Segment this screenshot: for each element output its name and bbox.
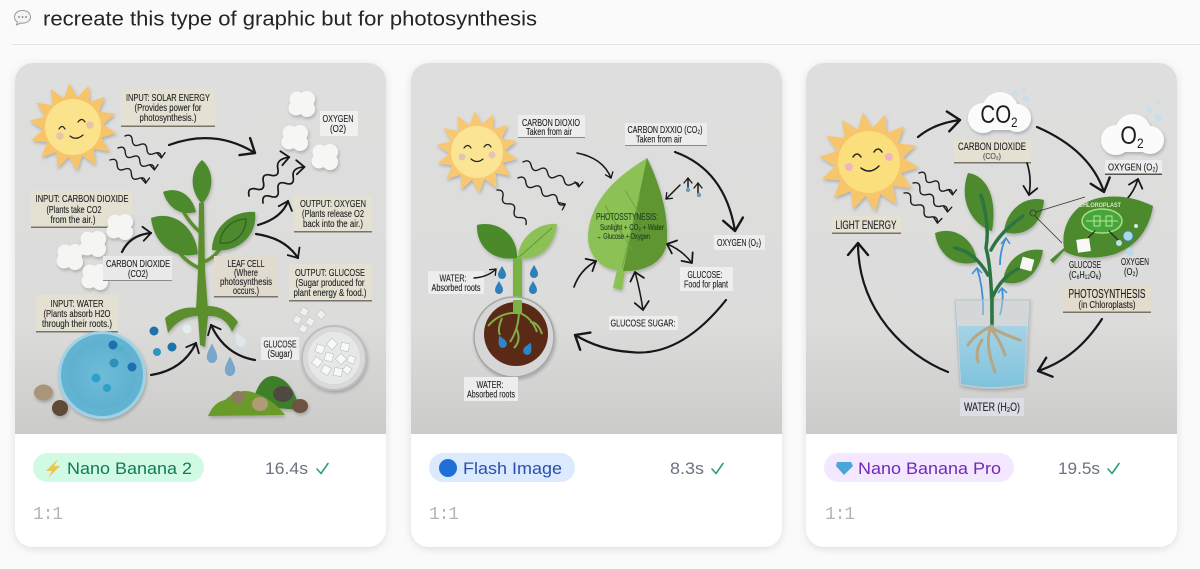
icon: speech bubble (14, 10, 30, 25)
arrow: water to sprout (474, 269, 496, 278)
icon: sun (430, 106, 524, 198)
label: oxygen: OXYGEN (O₂) (717, 237, 761, 249)
beads and droplets (150, 324, 248, 376)
badge: Nano Banana 2: Nano Banana 2 (67, 459, 192, 478)
label: input water: INPUT: WATER (50, 298, 104, 310)
arrow: photosynthesis to water (1038, 319, 1102, 371)
label: oxygen: (O2) (330, 123, 346, 135)
label: glucose food: Food for plant (684, 278, 728, 290)
label: input carbon dioxide: from the air.) (50, 214, 96, 226)
wavy oxygen arrows (246, 154, 307, 206)
generation time: 19.5s (1058, 459, 1100, 478)
label: oxygen (714, 235, 765, 250)
label: water (960, 398, 1024, 416)
arrow: carbon dioxide to leaf (577, 153, 611, 178)
label: glucose food (680, 267, 733, 291)
zoom lines to chloroplast leaf (1030, 197, 1085, 243)
cloud: CO2: 2 (1011, 114, 1018, 130)
label: leaf cell: (Where (234, 267, 258, 279)
label: carbon dxxio: CARBON DXXIO (CO₂) (628, 124, 702, 136)
label: water absorbed roots: Absorbed roots (432, 282, 480, 294)
label: water absorbed roots lower: WATER: (476, 379, 504, 391)
generation time (670, 459, 723, 478)
label: output oxygen: back into the air.) (303, 218, 363, 230)
sprout (477, 224, 557, 306)
label: carbon dioxide: CARBON DIOXIDE (106, 258, 170, 270)
label: oxygen (320, 111, 358, 136)
labels: glucose and oxygen: (O₂) (1124, 266, 1138, 278)
aspect ratio: 1:1 (429, 505, 459, 525)
panel: Nano Banana 2 card (15, 63, 386, 547)
cloud: CO2: CO (980, 100, 1011, 128)
label: carbon dioxide: (CO2) (128, 268, 148, 280)
label: input carbon dioxide: INPUT: CARBON DIOXIDE (36, 193, 128, 205)
leaf text: photosynthesis equation (596, 211, 664, 241)
label: water absorbed roots: WATER: (440, 272, 466, 284)
label: input solar energy: INPUT: SOLAR ENERGY (126, 92, 210, 104)
leaf text: photosynthesis equation: PHOTOSSTYNESIS: (596, 211, 658, 223)
label: carbon dioxide (103, 256, 172, 281)
labels: glucose and oxygen: GLUCOSE (1069, 259, 1101, 271)
glass of water with roots (955, 296, 1030, 388)
label: water absorbed roots lower: Absorbed roots (467, 388, 515, 400)
arrow: leaf to oxygen (1126, 179, 1138, 200)
chloroplast leaf (1050, 197, 1153, 263)
image: felt cycle background (806, 63, 1177, 434)
label: input solar energy (121, 89, 215, 127)
felt plant with blue xylem arrows (935, 173, 1044, 322)
water drops (495, 265, 538, 294)
generation time (265, 459, 328, 478)
label: carbon dioxide (954, 140, 1031, 164)
label: input solar energy: (Provides power for (134, 102, 202, 114)
water dish with beads (58, 331, 146, 419)
label: output glucose (289, 264, 372, 302)
bowl of sugar crystals (302, 326, 366, 390)
arrow: sun to carbon dioxide (918, 120, 960, 137)
label: carbon dxxio (625, 123, 707, 146)
leaf: photosynthesis (588, 158, 667, 290)
label: water absorbed roots lower (464, 377, 518, 401)
label: photosynthesis in chloroplasts: (in Chloroplasts) (1078, 299, 1136, 311)
label: photosynthesis in chloroplasts (1063, 285, 1151, 313)
aspect ratio: 1:1 (33, 505, 63, 525)
label: light energy (832, 216, 901, 234)
cloud: CO2 (968, 88, 1031, 133)
arrow: carbon dioxide to chloroplast leaf (1037, 127, 1104, 192)
label: glucose food: GLUCOSE: (688, 269, 722, 281)
label: input water: through their roots.) (42, 318, 112, 330)
label: glucose (261, 337, 299, 360)
label: input water: (Plants absorb H2O (44, 308, 110, 320)
image: paper collage background (411, 63, 782, 434)
dish with soil and roots (474, 297, 554, 377)
label: glucose sugar (609, 316, 678, 330)
prompt text: recreate this type of graphic but for photosynthesis (43, 8, 537, 30)
label: carbon dioxide: CARBON DIOXIDE (958, 141, 1026, 153)
label: water: WATER (H₂O) (964, 400, 1020, 414)
label: water absorbed roots (428, 271, 484, 294)
chloroplast detail (1076, 202, 1138, 256)
prompt header (14, 8, 537, 30)
badge: Flash Image (429, 453, 575, 482)
label: carbon dioxide: (CO₂) (983, 152, 1001, 161)
label: output oxygen: OUTPUT: OXYGEN (300, 198, 366, 210)
cloud: O2: O (1120, 121, 1137, 149)
label: output oxygen: (Plants release O2 (302, 208, 364, 220)
label: carbon dioxio (518, 115, 585, 138)
arrow: water to roots (151, 343, 196, 375)
badge: Nano Banana Pro (824, 453, 1014, 482)
badge: Nano Banana Pro: Nano Banana Pro (858, 459, 1001, 478)
arrow: carbon dioxide to plant (1027, 163, 1030, 195)
labels: glucose and oxygen: (C₆H₁₂O₆) (1069, 269, 1101, 281)
felt hills and rocks (208, 376, 308, 416)
label: oxygen: OXYGEN (322, 113, 354, 125)
label: leaf cell: occurs.) (233, 285, 259, 297)
cotton balls: oxygen (282, 91, 338, 170)
arrow: sun to oxygen (169, 138, 255, 153)
generation time: 8.3s (670, 459, 704, 478)
image: felt collage background (15, 63, 386, 434)
cloud: O2: 2 (1137, 135, 1144, 151)
leaf text: photosynthesis equation: → Glucose + Oxygen (596, 231, 650, 241)
arrow: water to light energy (858, 243, 948, 372)
label: leaf cell: photosynthesis (220, 276, 272, 288)
arrow: glucose back to soil (575, 300, 726, 353)
arrow: to output glucose (256, 234, 298, 258)
label: photosynthesis in chloroplasts: PHOTOSYNTHESIS (1068, 286, 1146, 301)
generation time: 16.4s (265, 459, 308, 478)
label: input carbon dioxide: (Plants take CO2 (46, 204, 102, 216)
labels: glucose and oxygen (1069, 256, 1149, 281)
felt plant (151, 160, 255, 347)
aspect ratio: 1:1 (825, 505, 855, 525)
generation time (1058, 459, 1119, 478)
wavy sunlight arrows (108, 133, 163, 186)
label: oxygen (1105, 160, 1162, 175)
label: glucose: GLUCOSE (264, 338, 296, 350)
label: glucose sugar: GLUCOSE SUGAR: (610, 318, 676, 330)
arrow: to output oxygen (258, 201, 288, 225)
arrow: glucose to roots (211, 325, 255, 360)
label: output glucose: (Sugar produced for (296, 277, 365, 289)
cotton balls: carbon dioxide (56, 214, 133, 290)
arrow: to oxygen (675, 152, 735, 231)
label: output oxygen (294, 196, 372, 232)
label: carbon dioxio: Taken from air (526, 126, 572, 138)
chloroplast detail: CHLOROPLAST (1079, 202, 1121, 209)
wavy sunlight arrows (902, 170, 954, 225)
label: leaf cell (214, 256, 278, 298)
label: oxygen: OXYGEN (O₂) (1108, 162, 1158, 174)
label: light energy: LIGHT ENERGY (836, 218, 896, 232)
arrow: carbon dioxide into leaf (122, 233, 151, 252)
wavy sunlight arrows (495, 159, 580, 226)
badge: Flash Image: Flash Image (463, 459, 562, 478)
panel: Nano Banana Pro card (806, 63, 1177, 547)
arrow: soil to leaf (574, 261, 596, 287)
label: output glucose: OUTPUT: GLUCOSE (295, 267, 365, 279)
label: output glucose: plant energy & food.) (294, 287, 366, 299)
panel: Flash Image card (411, 63, 782, 547)
double arrow: leaf and glucose (667, 244, 692, 263)
sugar cubes (292, 307, 326, 333)
rocks (34, 384, 68, 416)
leaf text: photosynthesis equation: Sunlight + CO₂ + Water (600, 222, 664, 232)
label: leaf cell: LEAF CELL (228, 258, 265, 270)
badge: Nano Banana 2 (33, 453, 204, 482)
double arrow: leaf and glucose sugar (635, 272, 643, 310)
label: carbon dxxio: Taken from air (636, 134, 682, 146)
label: input solar energy: photosynthesis.) (140, 112, 196, 124)
small arrows and molecules (666, 178, 701, 199)
icon: sun (814, 108, 924, 216)
label: input water (36, 295, 118, 332)
labels: glucose and oxygen: OXYGEN (1121, 256, 1149, 268)
label: input carbon dioxide (31, 191, 132, 228)
cloud: O2 (1101, 100, 1164, 155)
label: carbon dioxio: CARBON DIOXIO (522, 117, 580, 129)
icon: sun (23, 78, 123, 176)
label: glucose: (Sugar) (268, 348, 292, 360)
